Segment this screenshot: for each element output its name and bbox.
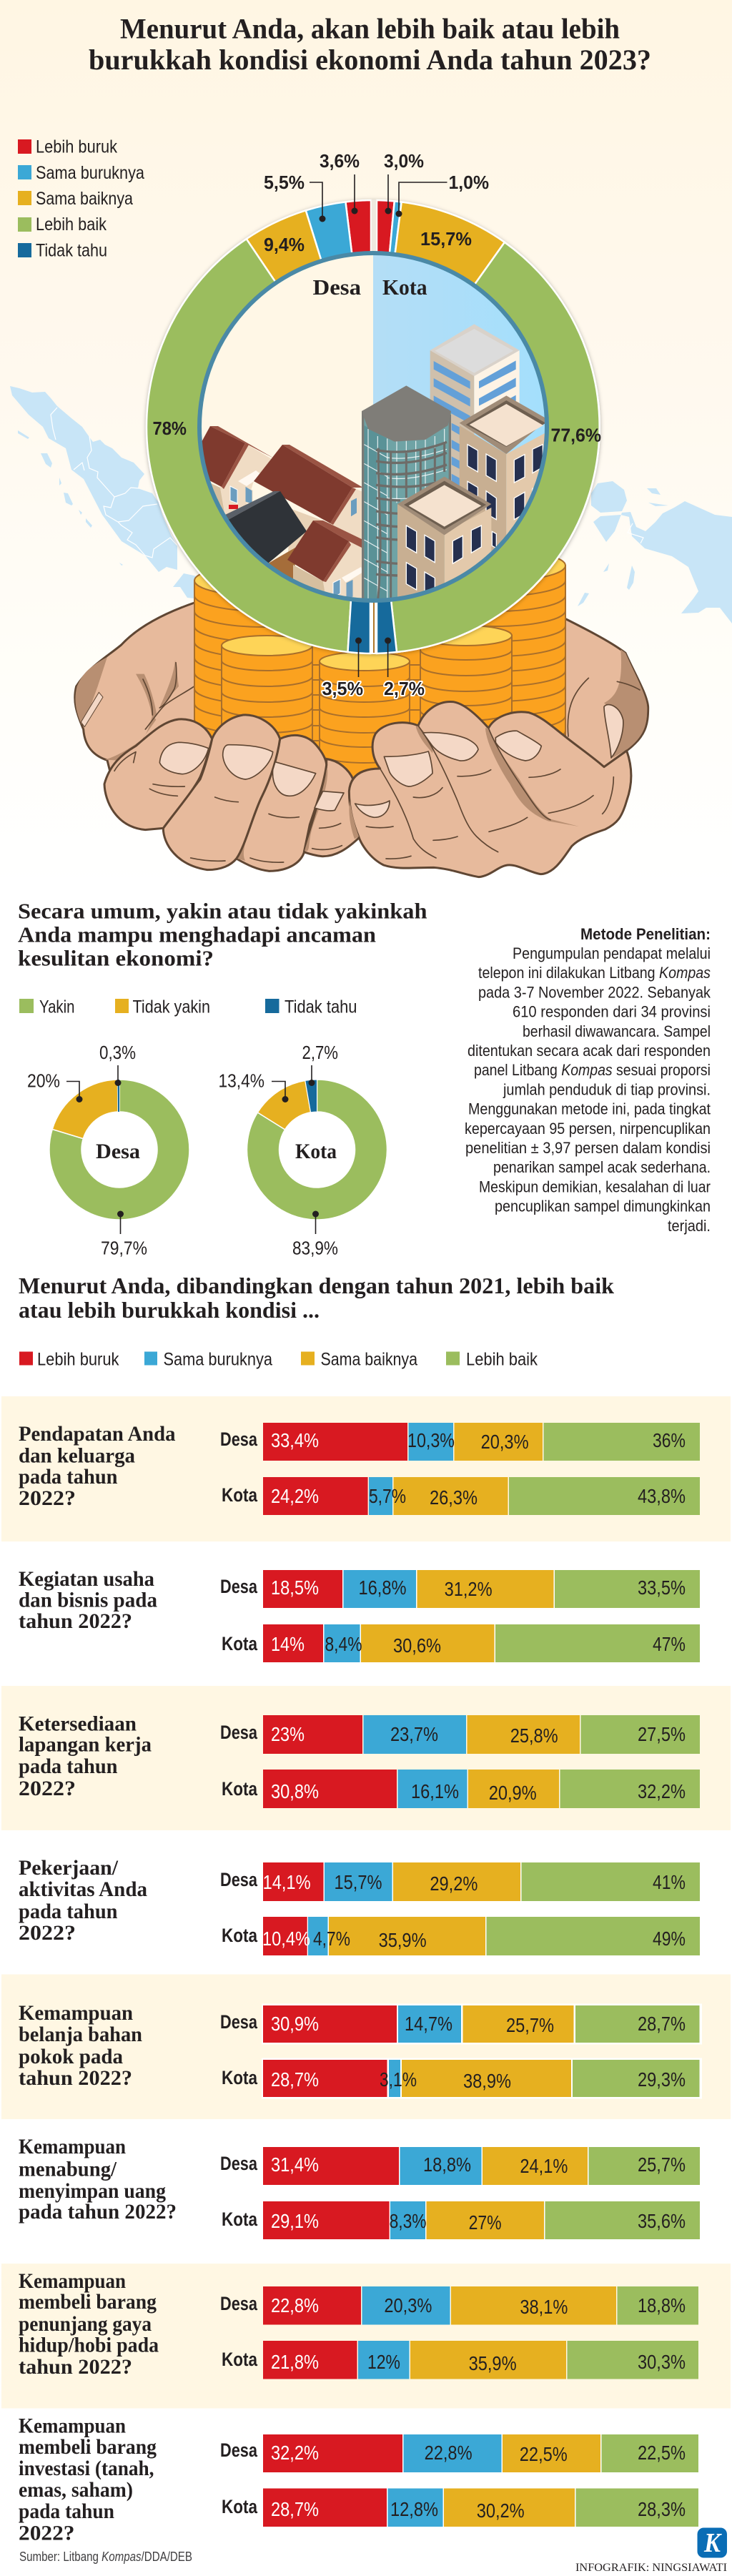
bar: Desa: 20,3% [481,1431,529,1453]
bar: Kota: 35,9% [469,2352,517,2374]
bar: Desa [220,2147,700,2185]
icon: Kompas logo [698,2528,727,2558]
heading: keyakinan [18,898,427,971]
question: pada tahun [19,1465,118,1489]
bar: Desa: 31,4% [271,2153,319,2176]
labels: main donut: 3,5% [322,678,363,699]
panel: investasi [19,2414,698,2545]
bar: Desa: 25,7% [506,2014,554,2036]
bar: Kota: 35,6% [638,2210,686,2232]
text block: Metode Penelitian: penelitian ± 3,97 persen dalam kondisi [465,1139,711,1157]
bar: Kota: Kota [222,1778,258,1800]
bar: Desa: 22,8% [271,2294,319,2316]
building: city towers [362,324,548,610]
bar: Desa: 25,7% [638,2153,686,2176]
chart: donut Kota [219,1042,387,1258]
bar: Desa [220,2286,698,2325]
bar: Desa: 33,4% [271,1429,319,1451]
bar: Desa: 18,5% [271,1576,319,1599]
bar: Desa [220,1862,700,1901]
bar: Kota: 8,4% [325,1633,362,1655]
title [89,13,651,76]
bar: Desa: 32,2% [271,2442,319,2464]
labels: main donut: 9,4% [264,234,305,255]
bar: Desa [220,1423,700,1461]
question: tahun 2022? [19,1609,132,1633]
question: membeli barang [19,2435,157,2459]
legend: small donuts: Tidak tahu [285,997,357,1017]
segments: Kota right half [377,200,600,653]
question [19,1567,157,1633]
bar: Kota: 4,7% [313,1928,350,1950]
question: pada tahun [19,1900,118,1923]
bar: Kota: 10,4% [262,1928,310,1950]
bar: Desa: 14,7% [405,2013,452,2035]
text block: Metode Penelitian [465,925,711,1235]
panel: pendapatan [1,1396,731,1541]
bar: Kota [222,1917,700,1955]
text block: Metode Penelitian: Metode Penelitian: [580,925,711,943]
bar: Kota: 29,3% [638,2068,686,2091]
labels: main donut: 3,6% [320,150,360,172]
bar: Desa: Desa [220,1428,258,1450]
icon: Kompas logo: K [703,2528,722,2558]
panel: gaya hidup [1,2264,731,2408]
title: Menurut Anda, akan lebih baik atau lebih [120,13,620,44]
bar: Kota: Kota [222,2496,258,2517]
legend: top donut: Tidak tahu [36,240,107,260]
bar: Desa: 33,5% [638,1576,686,1599]
bar: Kota: 16,1% [411,1780,459,1802]
credit: INFOGRAFIK: NINGSIAWATI [575,2562,727,2574]
bar: Kota: Kota [222,2067,258,2088]
bar: Desa: 29,2% [430,1872,478,1895]
bar: Kota: Kota [222,2209,258,2230]
panel: lapangan kerja [1,1686,731,1830]
labels: main donut: 15,7% [420,228,472,250]
bar: Desa: 18,8% [423,2153,471,2176]
question: pokok pada [19,2045,123,2068]
bar: Kota: Kota [222,1484,258,1506]
chart: donut Desa: 20% [27,1070,60,1091]
question: investasi (tanah, [19,2457,154,2480]
labels: main donut: 78% [153,418,187,439]
map: Indonesia background [10,386,732,623]
bar: Desa: 31,2% [445,1578,493,1600]
question: Ketersediaan [19,1712,137,1736]
question: Kegiatan usaha [19,1567,154,1591]
question: belanja bahan [19,2023,142,2046]
bar: Kota [222,1477,700,1515]
bar: Desa: Desa [220,2153,258,2174]
bar: Kota: 30,8% [271,1780,319,1802]
bar: Desa: 38,1% [520,2296,568,2318]
labels: main donut: 5,5% [264,172,305,193]
heading: keyakinan: Secara umum, yakin atau tidak yakinkah [18,898,427,924]
question: emas, saham) [19,2478,133,2502]
bar: Kota: 29,1% [271,2210,319,2232]
question: tahun 2022? [19,2066,132,2090]
question: Kemampuan [19,2414,126,2438]
question: Kemampuan [19,2001,133,2025]
panel: kegiatan usaha [19,1567,700,1662]
bar: Kota: 14% [271,1633,305,1655]
chart: donut Desa: 0,3% [99,1042,136,1063]
panel: pekerjaan [19,1856,700,1955]
text block: Metode Penelitian: 610 responden dari 34 provinsi [513,1003,711,1021]
bar: Kota: 30,3% [638,2351,686,2373]
legend: small donuts [19,997,357,1017]
bar: Desa [220,1715,700,1754]
labels: main donut: 2,7% [384,678,425,699]
question: 2022? [19,1777,76,1800]
text block: Metode Penelitian: jumlah penduduk di tiap provinsi. [503,1080,711,1098]
bar: Kota: 30,2% [477,2499,525,2522]
question: membeli barang [19,2290,157,2314]
text block: Metode Penelitian: panel Litbang Kompas sesuai proporsi [474,1061,711,1079]
question [19,1422,176,1510]
source note: Sumber: Litbang Kompas/DDA/DEB [19,2550,192,2564]
question [19,2414,157,2545]
bar: Kota: 47% [653,1633,686,1655]
bar: Kota: 38,9% [463,2070,511,2092]
text block: Metode Penelitian: telepon ini dilakukan Litbang Kompas [478,964,711,982]
bar: Desa: Desa [220,1576,258,1597]
question: pada tahun [19,2499,114,2523]
chart: donut Kota: Kota [295,1140,337,1163]
bar: Kota: 8,3% [390,2210,427,2232]
bar: Desa: 22,8% [425,2442,473,2464]
text block: Metode Penelitian: Pengumpulan pendapat melalui [513,944,711,962]
chart: donut Desa: Desa [96,1140,140,1163]
question: tahun 2022? [19,2355,132,2379]
question: pada tahun [19,1755,118,1778]
bar: Desa: Desa [220,1869,258,1890]
legend: top donut: Sama buruknya [36,163,144,183]
legend: top donut [18,137,144,260]
bar: Desa: 41% [653,1871,686,1893]
title: burukkah kondisi ekonomi Anda tahun 2023? [89,44,651,76]
chart: donut Kota: 83,9% [292,1237,338,1258]
bar: Desa: Desa [220,2293,258,2314]
legend: bar charts: Lebih buruk [37,1350,119,1370]
front tan building [397,504,445,596]
bar: Desa: 28,7% [638,2013,686,2035]
question: Kemampuan [19,2269,126,2293]
bar: Kota: 26,3% [430,1486,478,1509]
bar: Desa: 27,5% [638,1723,686,1745]
bar: Kota: 43,8% [638,1485,686,1507]
bar: Kota: 35,9% [379,1929,427,1951]
bar: Kota: 3,1% [380,2068,417,2091]
bar: Kota: 12,8% [390,2498,438,2520]
bar: Desa: 24,1% [520,2155,568,2177]
bar: Desa [220,2003,702,2045]
chart: main donut Desa Kota [146,199,600,654]
bar: Desa: 22,5% [520,2443,568,2465]
legend: bar charts: Sama buruknya [163,1350,272,1370]
bar: Desa: Desa [220,2011,258,2033]
bar: Kota: 28,7% [271,2498,319,2520]
panel: bahan pokok [1,1975,731,2119]
bar: Kota: 12% [367,2351,400,2373]
legend: bar charts: Sama baiknya [320,1350,417,1370]
labels: main donut: 3,0% [384,150,424,172]
legend: top donut: Sama baiknya [36,189,133,209]
question: lapangan kerja [19,1733,152,1756]
question [19,2269,159,2379]
question: aktivitas Anda [19,1877,147,1901]
heading: perbandingan 2021: atau lebih burukkah kondisi ... [19,1297,320,1323]
question: 2022? [19,1486,76,1510]
question: menabung/ [19,2158,117,2181]
bar: Desa: 20,3% [384,2294,432,2316]
bar: Kota: 49% [653,1928,686,1950]
question: 2022? [19,1921,76,1945]
question [19,2001,142,2090]
question: pada tahun 2022? [19,2200,177,2224]
question: dan keluarga [19,1444,135,1467]
bar: Kota: Kota [222,1925,258,1946]
bar: Desa: Desa [220,1722,258,1743]
question: Kemampuan [19,2135,126,2158]
chart: donut Kota: 13,4% [219,1070,264,1091]
legend: top donut: Lebih baik [36,214,107,235]
bar: Kota: Kota [222,1633,258,1654]
bar: Desa: 22,5% [638,2442,686,2464]
legend: bar charts [19,1350,538,1370]
rear tan building [459,425,506,551]
bar: Desa: 23,7% [390,1723,438,1745]
bar: Kota: 32,2% [638,1780,686,1802]
illustration: right hand fingers [349,702,631,877]
bar: Kota: Kota [222,2349,258,2370]
legend: bar charts: Lebih baik [466,1350,538,1370]
legend: top donut: Lebih buruk [36,137,117,157]
illustration: left hand fingers [104,715,360,871]
bar: Kota [222,1770,700,1808]
bar: Desa: 23% [271,1723,305,1745]
legend: small donuts: Yakin [39,997,74,1017]
house: front roofs and walls [202,426,362,598]
panel: menabung [19,2135,700,2239]
bar: Kota: 28,3% [638,2498,686,2520]
bar: Desa [220,2434,698,2472]
bar: Desa: 36% [653,1429,686,1451]
bar: Desa: 15,7% [335,1871,382,1893]
question [19,1712,152,1800]
bar: Kota: 28,7% [271,2068,319,2091]
chart: donut Desa: 79,7% [101,1237,147,1258]
bar: Desa [220,1570,700,1608]
labels: main donut [153,150,601,699]
bar: Kota: 21,8% [271,2351,319,2373]
bar: Kota [222,2341,698,2379]
legend: small donuts: Tidak yakin [133,997,210,1017]
question: hidup/hobi pada [19,2334,159,2357]
bar: Kota [222,1624,700,1662]
chart: donut Desa [27,1042,189,1258]
bar: Kota: 30,6% [393,1634,441,1657]
bar: Desa: 18,8% [638,2294,686,2316]
segments: Desa left half [147,200,371,653]
text block: Metode Penelitian: terjadi. [668,1217,711,1235]
bar: Kota [222,2058,702,2099]
question: Pekerjaan/ [19,1856,119,1880]
bar: Kota: 20,9% [489,1782,537,1804]
bar: Desa: 16,8% [359,1576,406,1599]
question [19,2135,177,2224]
bar: Kota: 5,7% [369,1485,406,1507]
bar: Kota [222,2488,698,2527]
illustration: hand backs [75,598,648,771]
question [19,1856,147,1945]
bar: Desa: 30,9% [271,2013,319,2035]
bar: Kota: 27% [469,2211,502,2234]
bar: Kota: 24,2% [271,1485,319,1507]
chart: donut Kota: 2,7% [302,1042,338,1063]
scene: village and city inside donut [193,250,552,610]
question: 2022? [19,2521,74,2545]
illustration: coin stacks [194,550,565,790]
heading: perbandingan 2021: Menurut Anda, dibandingkan dengan tahun 2021, lebih baik [19,1273,614,1298]
labels: main donut: Desa [313,275,362,300]
bar: Desa: 10,3% [407,1429,455,1451]
bar: Desa: Desa [220,2439,258,2461]
question: Pendapatan Anda [19,1422,176,1446]
heading: perbandingan 2021 [19,1273,614,1323]
heading: keyakinan: kesulitan ekonomi? [18,945,214,971]
labels: main donut: 1,0% [449,172,489,193]
question: penunjang gaya [19,2312,152,2336]
bar: Kota [222,2201,700,2239]
heading: keyakinan: Anda mampu menghadapi ancaman [18,922,376,947]
labels: main donut: Kota [382,275,427,300]
question: menyimpan uang [19,2179,166,2203]
bar: Desa: 14,1% [263,1871,311,1893]
question: dan bisnis pada [19,1589,157,1612]
bar: Desa: 25,8% [510,1724,558,1747]
labels: main donut: 77,6% [550,425,601,446]
